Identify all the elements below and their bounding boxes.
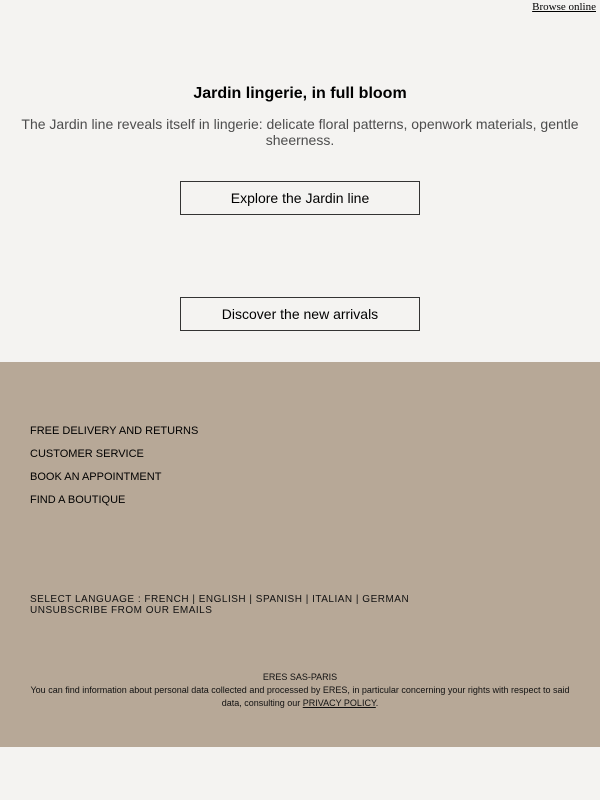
footer link: find a boutique: FIND A BOUTIQUE bbox=[30, 494, 125, 506]
footer link: free delivery: FREE DELIVERY AND RETURNS bbox=[30, 425, 198, 437]
footer link: customer service: CUSTOMER SERVICE bbox=[30, 448, 144, 460]
intro text: The Jardin line reveals itself in lingerie: delicate floral patterns, openwork materials, gentle sheerness. bbox=[21, 116, 579, 148]
language and unsubscribe links: SELECT LANGUAGE : FRENCH | ENGLISH | SPANISH | ITALIAN | GERMAN bbox=[30, 594, 409, 605]
legal text: ERES SAS-PARIS bbox=[263, 672, 337, 682]
button: discover the new arrivals bbox=[180, 297, 420, 331]
button: explore the Jardin line bbox=[180, 181, 420, 215]
button: discover the new arrivals: Discover the new arrivals bbox=[222, 306, 378, 322]
button: explore the Jardin line: Explore the Jardin line bbox=[231, 190, 369, 206]
legal text: You can find information about personal data collected and processed by ERES, in particular concerning your rights with respect to said data, consulting our PRIVACY POLICY. bbox=[30, 685, 569, 708]
heading: Jardin lingerie, in full bloom bbox=[193, 85, 407, 102]
legal text bbox=[30, 672, 569, 708]
language and unsubscribe links: UNSUBSCRIBE FROM OUR EMAILS bbox=[30, 605, 212, 616]
footer link: book an appointment: BOOK AN APPOINTMENT bbox=[30, 471, 161, 483]
browse online link: Browse online bbox=[532, 1, 596, 13]
language and unsubscribe links bbox=[30, 594, 409, 616]
panel: footer bbox=[0, 362, 600, 747]
